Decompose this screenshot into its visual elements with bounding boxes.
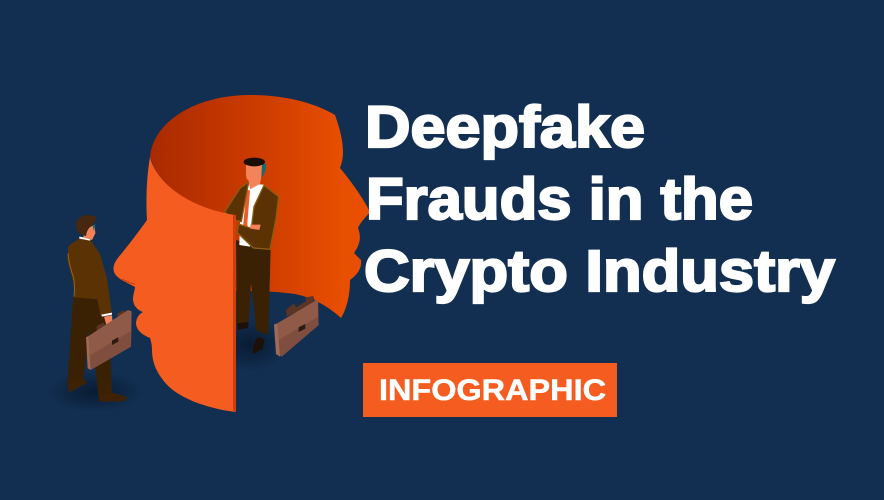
briefcase front — [89, 310, 132, 370]
badge: infographic — [363, 363, 617, 417]
jacket edge highlight — [68, 253, 75, 297]
inner businessman — [225, 158, 279, 354]
outer businessman — [67, 215, 132, 402]
title line 2: Frauds in the — [366, 167, 753, 232]
hand — [104, 315, 113, 326]
briefcase lower band — [90, 331, 131, 370]
briefcase handle — [97, 310, 127, 333]
shoes — [237, 322, 265, 354]
teal hair side — [261, 164, 266, 178]
illustration: split head with two businessmen — [47, 95, 370, 412]
front wall edge — [233, 215, 236, 412]
collar — [79, 237, 91, 241]
cuff — [101, 313, 112, 317]
jacket — [67, 238, 112, 316]
badge label: INFOGRAPHIC — [379, 374, 606, 407]
case lower band — [279, 317, 319, 357]
floor shadow under outer man — [47, 372, 143, 412]
handle — [286, 296, 315, 317]
hair top — [244, 158, 265, 166]
teal hair side — [93, 224, 95, 232]
nostril line — [122, 279, 135, 284]
tie — [242, 189, 250, 238]
inner briefcase — [274, 296, 319, 357]
title line 3: Crypto Industry — [364, 239, 835, 304]
clasp — [299, 324, 305, 332]
head back wall — [150, 95, 370, 318]
head front wall — [113, 157, 235, 412]
badge background — [363, 363, 617, 417]
jacket — [225, 182, 279, 249]
trousers — [236, 240, 271, 335]
briefcase side — [86, 336, 91, 370]
title line 1: Deepfake — [365, 95, 645, 160]
trousers — [67, 297, 112, 396]
briefcase clasp — [112, 337, 118, 345]
shoes — [67, 378, 127, 402]
title — [364, 95, 835, 304]
crossed hand — [250, 225, 261, 230]
neck and ear — [83, 225, 95, 240]
floor shadow under inner man — [212, 319, 288, 371]
case front — [277, 299, 319, 357]
shirt — [239, 184, 264, 247]
case side — [274, 323, 280, 357]
face and neck — [246, 165, 262, 189]
hair — [76, 215, 96, 236]
